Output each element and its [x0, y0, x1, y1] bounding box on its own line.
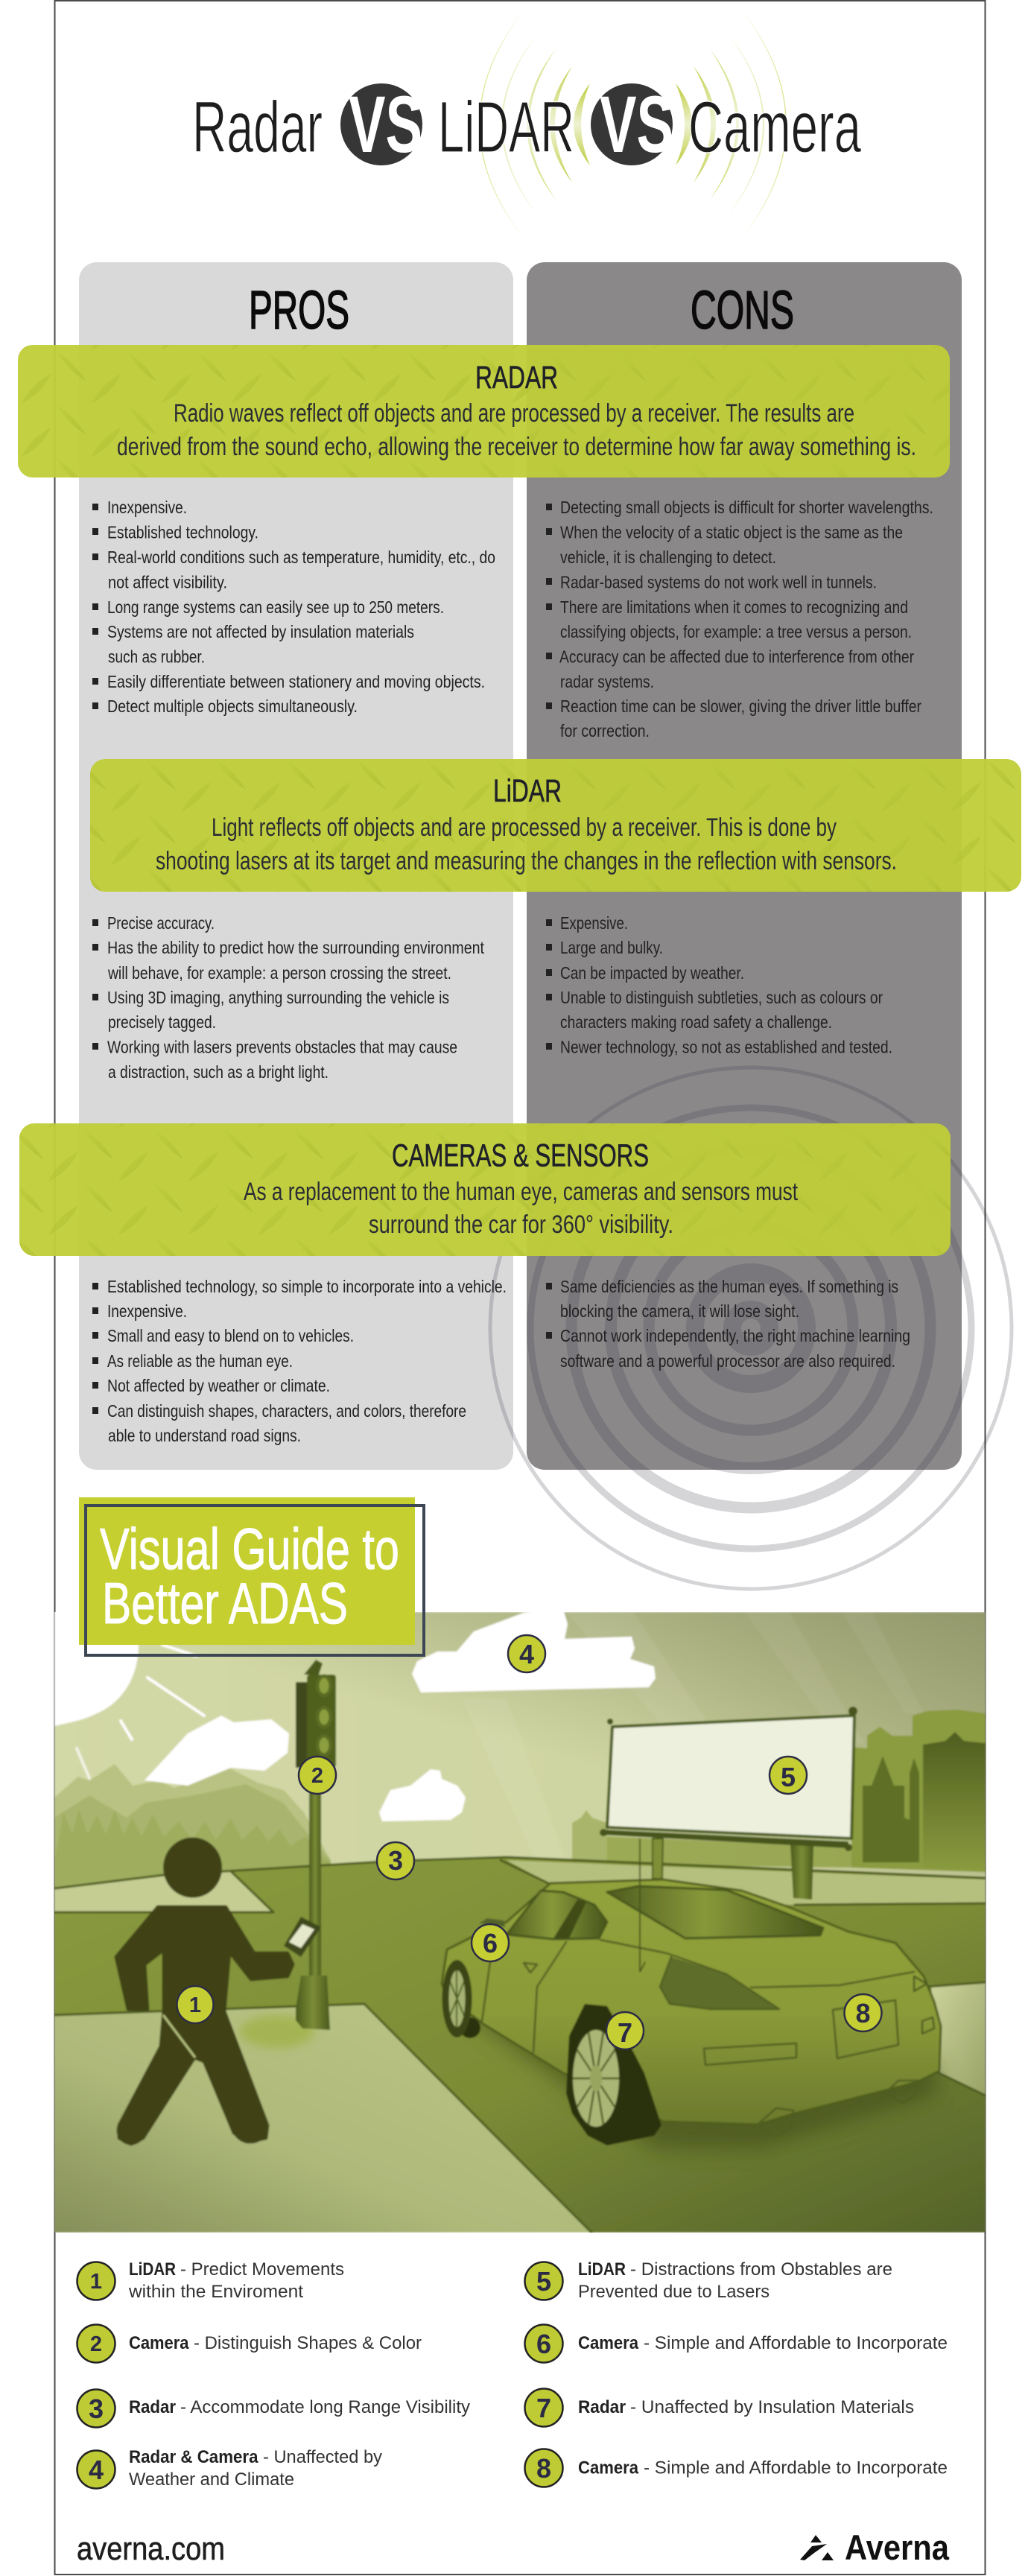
legend item 1: within the Enviroment	[128, 2282, 303, 2302]
VS badge one: VS	[349, 79, 422, 169]
legend item 3: Radar	[129, 2397, 176, 2417]
list: camera cons	[546, 1277, 910, 1371]
legend item 4	[77, 2447, 382, 2490]
legend item 1: 1	[90, 2270, 102, 2294]
marker 5	[770, 1757, 807, 1794]
marker 4	[508, 1635, 545, 1672]
marker 2: 2	[311, 1764, 323, 1788]
list: camera pros	[92, 1277, 507, 1445]
legend item 7: 7	[536, 2393, 551, 2423]
list: lidar pros	[92, 913, 485, 1082]
traffic light	[296, 1660, 336, 2030]
VS badge one	[340, 79, 422, 169]
road	[54, 1857, 986, 2233]
phone	[284, 1917, 321, 1957]
band: cameras and sensors: As a replacement to the human eye, cameras and sensors must	[244, 1178, 798, 1206]
marker 7	[606, 2012, 644, 2049]
legend item 8: - Simple and Affordable to Incorporate	[644, 2458, 948, 2478]
scene illustration	[54, 1602, 986, 2233]
legend item 8	[524, 2449, 948, 2487]
marker 3: 3	[388, 1845, 403, 1876]
legend item 4: - Unaffected by	[263, 2447, 382, 2467]
panel: cons background	[527, 262, 962, 1470]
band: cameras and sensors	[19, 1123, 951, 1256]
list: radar cons: There are limitations when it comes to recognizing and	[560, 597, 908, 617]
list: lidar pros: a distraction, such as a bright light.	[108, 1062, 329, 1082]
panel: pros background	[79, 262, 513, 1470]
legend item 1	[77, 2259, 344, 2302]
list: lidar pros: will behave, for example: a person crossing the street.	[107, 963, 451, 983]
title: Radar	[192, 86, 323, 168]
logo: averna: Averna	[845, 2528, 950, 2567]
legend	[77, 2259, 948, 2490]
clouds and sun rays	[54, 1602, 656, 1821]
title: Camera	[688, 86, 861, 168]
list: radar pros: Real-world conditions such as temperature, humidity, etc., do	[107, 548, 495, 567]
legend item 2: 2	[90, 2332, 102, 2356]
title: LiDAR	[438, 86, 574, 168]
list: lidar pros: Using 3D imaging, anything surrounding the vehicle is	[107, 988, 449, 1007]
car	[442, 1839, 941, 2149]
list: lidar pros: Working with lasers prevents obstacles that may cause	[107, 1037, 457, 1056]
legend item 6: - Simple and Affordable to Incorporate	[644, 2333, 948, 2353]
list: radar cons: Accuracy can be affected due to interference from other	[559, 647, 914, 666]
billboard	[600, 1707, 857, 1900]
list: radar cons: radar systems.	[560, 672, 654, 691]
list: lidar pros: precisely tagged.	[108, 1012, 216, 1032]
band: lidar: LiDAR	[493, 773, 562, 809]
marker 6: 6	[483, 1928, 498, 1958]
list: camera pros: Small and easy to blend on to vehicles.	[107, 1326, 354, 1345]
list: radar pros: Easily differentiate between stationery and moving objects.	[107, 672, 485, 691]
VS badge two	[591, 79, 673, 169]
list: radar cons: vehicle, it is challenging to detect.	[560, 548, 776, 567]
legend item 2: - Distinguish Shapes & Color	[194, 2333, 422, 2353]
legend item 5: LiDAR	[578, 2259, 626, 2280]
list: lidar cons: Expensive.	[560, 913, 628, 933]
list: radar pros: Systems are not affected by insulation materials	[107, 622, 414, 641]
list: camera pros: As reliable as the human eye.	[107, 1351, 293, 1371]
list: lidar cons: Newer technology, so not as established and tested.	[560, 1037, 892, 1056]
band: cameras and sensors: CAMERAS & SENSORS	[392, 1138, 649, 1174]
list: radar cons: for correction.	[560, 721, 650, 740]
concentric target rings	[490, 1067, 1012, 1589]
legend item 4: 4	[89, 2455, 104, 2485]
band: radar	[18, 345, 950, 478]
list: radar cons: classifying objects, for example: a tree versus a person.	[560, 622, 912, 641]
legend item 3: - Accommodate long Range Visibility	[180, 2397, 470, 2417]
rear wheel	[566, 2004, 661, 2145]
panel: pros background: PROS	[249, 281, 349, 340]
list: radar cons	[546, 498, 933, 740]
marker 4: 4	[519, 1639, 534, 1669]
legend item 8: Camera	[578, 2458, 639, 2478]
heading: visual guide: Visual Guide to	[100, 1516, 399, 1582]
signal wave arcs	[479, 13, 787, 235]
legend item 6	[524, 2324, 948, 2363]
heading: visual guide: Better ADAS	[102, 1570, 348, 1636]
legend item 6: 6	[536, 2329, 551, 2359]
list: lidar pros: Precise accuracy.	[107, 913, 215, 933]
sky	[54, 1612, 986, 1878]
band: lidar: Light reflects off objects and are processed by a receiver. This is done by	[212, 813, 837, 842]
list: radar pros: Detect multiple objects simultaneously.	[107, 697, 358, 716]
list: radar pros: Inexpensive.	[107, 498, 187, 517]
list: radar pros: Established technology.	[107, 523, 258, 542]
marker 8	[845, 1994, 882, 2031]
panel: cons background: CONS	[691, 281, 794, 340]
heading: visual guide	[79, 1497, 424, 1655]
VS badge two: VS	[600, 79, 673, 169]
marker 2	[299, 1757, 336, 1794]
legend item 7: - Unaffected by Insulation Materials	[630, 2397, 914, 2417]
legend item 5	[524, 2259, 892, 2302]
list: radar cons: Radar-based systems do not work well in tunnels.	[560, 572, 877, 591]
list: camera pros: Can distinguish shapes, characters, and colors, therefore	[107, 1401, 466, 1421]
list: lidar cons	[546, 913, 892, 1056]
marker 3	[377, 1842, 414, 1879]
list: radar pros: not affect visibility.	[108, 572, 227, 591]
marker 5: 5	[781, 1762, 796, 1792]
list: radar pros	[92, 498, 495, 716]
front wheel	[442, 1960, 480, 2038]
logo: averna	[800, 2528, 950, 2567]
marker 6	[472, 1924, 509, 1961]
list: lidar cons: Large and bulky.	[560, 938, 663, 957]
band: cameras and sensors: surround the car for 360° visibility.	[369, 1211, 673, 1239]
list: radar cons: Detecting small objects is difficult for shorter wavelengths.	[560, 498, 933, 517]
legend item 8: 8	[536, 2453, 551, 2484]
legend item 5: Prevented due to Lasers	[578, 2282, 770, 2302]
legend item 5: - Distractions from Obstables are	[630, 2259, 892, 2280]
legend item 1: LiDAR	[129, 2259, 176, 2280]
legend item 5: 5	[536, 2266, 551, 2297]
legend item 7: Radar	[578, 2397, 626, 2417]
list: camera cons: software and a powerful processor are also required.	[560, 1351, 895, 1371]
legend item 2	[77, 2324, 422, 2363]
marker 7: 7	[618, 2017, 632, 2048]
list: camera pros: Not affected by weather or climate.	[107, 1376, 330, 1395]
legend item 2: Camera	[129, 2333, 189, 2353]
band: radar: RADAR	[475, 360, 558, 396]
marker 1	[177, 1986, 213, 2023]
mountains and trees	[54, 1764, 331, 1892]
list: lidar cons: Unable to distinguish subtleties, such as colours or	[560, 988, 883, 1007]
list: lidar cons: characters making road safety a challenge.	[560, 1012, 832, 1032]
scene markers	[177, 1635, 882, 2049]
list: lidar pros: Has the ability to predict how the surrounding environment	[107, 938, 485, 957]
list: radar pros: Long range systems can easily see up to 250 meters.	[107, 597, 444, 617]
legend item 4: Radar & Camera	[129, 2447, 258, 2467]
marker 8: 8	[855, 1998, 871, 2028]
list: camera pros: Inexpensive.	[107, 1301, 187, 1321]
legend item 4: Weather and Climate	[129, 2469, 294, 2490]
legend item 3: 3	[89, 2393, 104, 2424]
list: camera pros: Established technology, so simple to incorporate into a vehicle.	[107, 1277, 507, 1296]
marker 1: 1	[189, 1993, 201, 2017]
list: radar cons: When the velocity of a static object is the same as the	[560, 523, 903, 542]
band: lidar	[90, 759, 1021, 892]
list: camera cons: blocking the camera, it will lose sight.	[560, 1301, 799, 1321]
list: radar cons: Reaction time can be slower, giving the driver little buffer	[560, 697, 921, 716]
list: camera cons: Same deficiencies as the human eyes. If something is	[560, 1277, 898, 1296]
list: lidar cons: Can be impacted by weather.	[560, 963, 744, 983]
list: camera pros: able to understand road signs.	[108, 1426, 301, 1445]
city skyline	[572, 1710, 986, 1872]
pedestrian	[116, 1839, 293, 2144]
sidewalks	[54, 1857, 986, 2233]
title	[192, 13, 861, 235]
list: camera cons: Cannot work independently, the right machine learning	[560, 1326, 910, 1345]
list: radar pros: such as rubber.	[108, 647, 205, 666]
footer url: averna.com	[77, 2531, 225, 2567]
legend item 6: Camera	[578, 2333, 639, 2353]
legend item 1: - Predict Movements	[180, 2259, 344, 2280]
legend item 7	[524, 2388, 914, 2427]
legend item 3	[77, 2390, 470, 2427]
